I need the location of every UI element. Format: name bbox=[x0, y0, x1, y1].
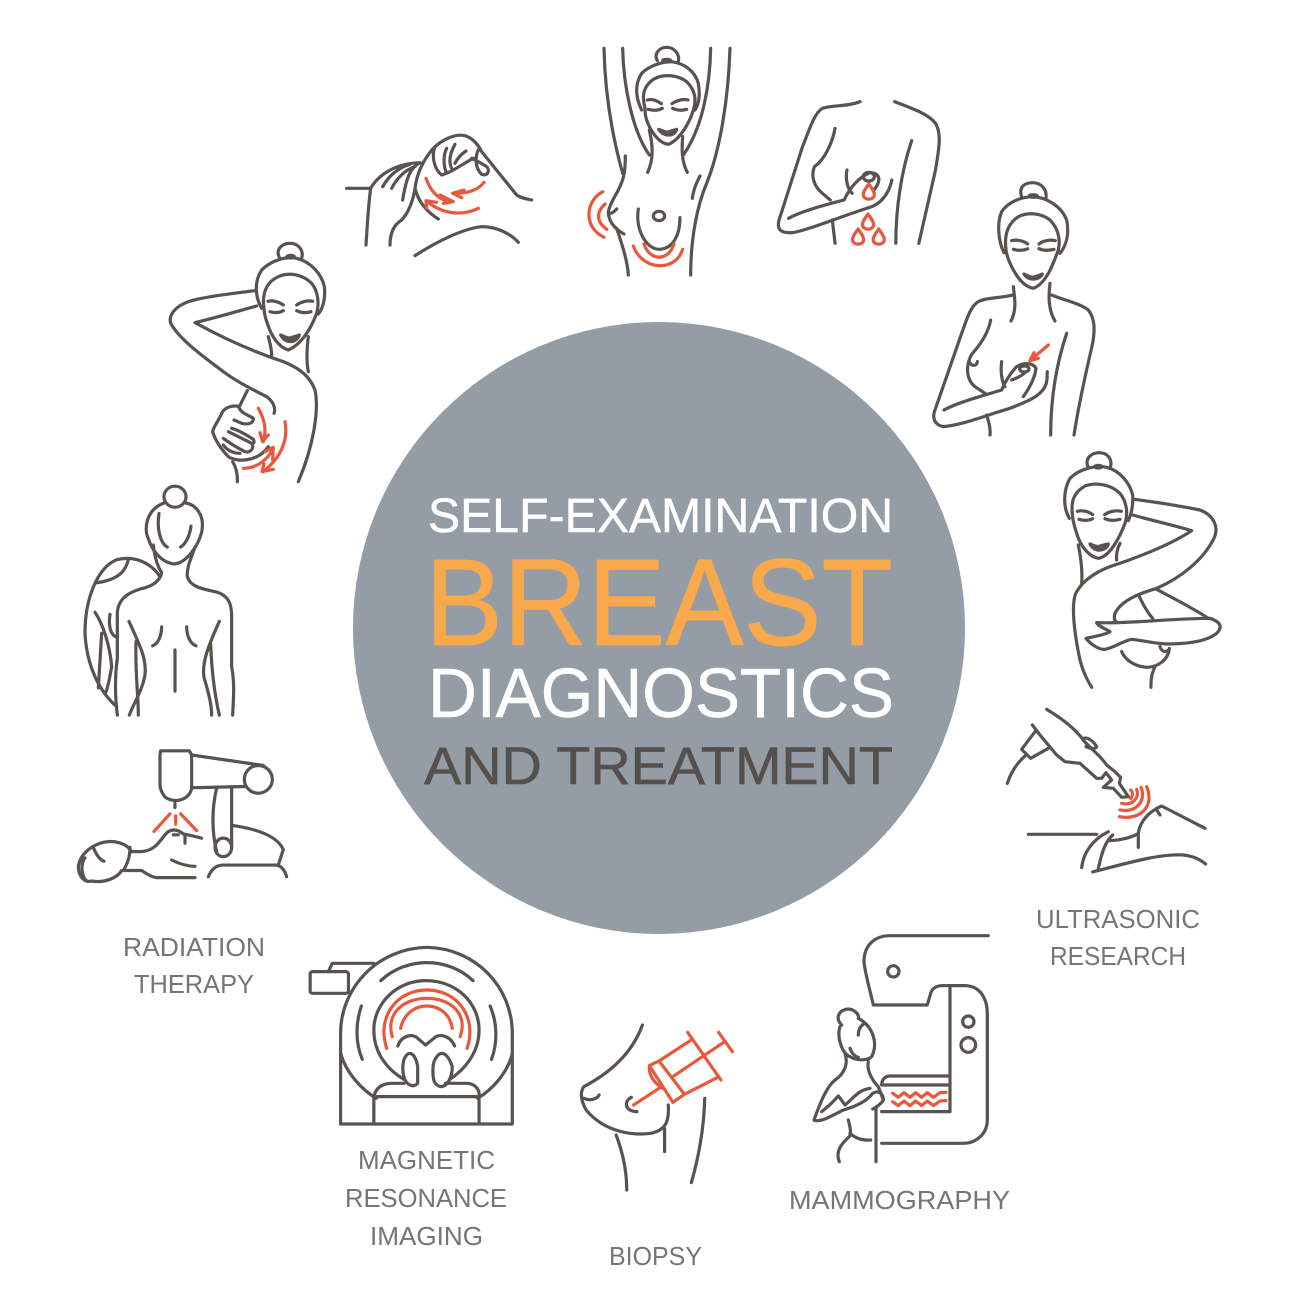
icon: radiation therapy machine bbox=[78, 751, 287, 882]
icon: hands massaging breast bbox=[347, 135, 532, 256]
icon: MRI scanner bbox=[310, 947, 512, 1124]
icon: mammography machine bbox=[814, 936, 988, 1162]
label: ultrasonic research: ULTRASONIC bbox=[1036, 904, 1200, 934]
heading: breast: BREAST bbox=[425, 535, 893, 672]
icon: nipple discharge drops bbox=[778, 102, 939, 244]
icon: woman with crossed arm lifting breast bbox=[1065, 453, 1220, 687]
label: biopsy: BIOPSY bbox=[609, 1241, 702, 1271]
label: magnetic resonance imaging: IMAGING bbox=[370, 1221, 483, 1251]
label: mammography: MAMMOGRAPHY bbox=[789, 1185, 1010, 1215]
icon: side motion arcs bbox=[589, 192, 607, 237]
icon: ultrasound probe on patient bbox=[1007, 709, 1206, 872]
label: magnetic resonance imaging: MAGNETIC bbox=[358, 1145, 495, 1175]
label: ultrasonic research bbox=[1036, 904, 1200, 971]
icon: woman examining with arm behind head bbox=[170, 243, 325, 482]
label: magnetic resonance imaging: RESONANCE bbox=[345, 1183, 507, 1213]
icon: woman with raised arms bbox=[604, 47, 730, 275]
icon: woman pressing nipple with arrow bbox=[934, 183, 1094, 435]
label: radiation therapy bbox=[123, 932, 265, 999]
title bbox=[424, 490, 894, 796]
label: ultrasonic research: RESEARCH bbox=[1050, 941, 1186, 971]
icon: back view woman bbox=[85, 486, 234, 715]
label: radiation therapy: THERAPY bbox=[134, 969, 254, 999]
icon: biopsy syringe bbox=[581, 1025, 732, 1190]
central grey circle bbox=[353, 322, 965, 934]
label: radiation therapy: RADIATION bbox=[123, 932, 265, 962]
label: magnetic resonance imaging bbox=[345, 1145, 507, 1251]
heading: and treatment: AND TREATMENT bbox=[424, 737, 893, 796]
heading: self-examination: SELF-EXAMINATION bbox=[428, 490, 893, 543]
heading: diagnostics: DIAGNOSTICS bbox=[428, 654, 894, 732]
